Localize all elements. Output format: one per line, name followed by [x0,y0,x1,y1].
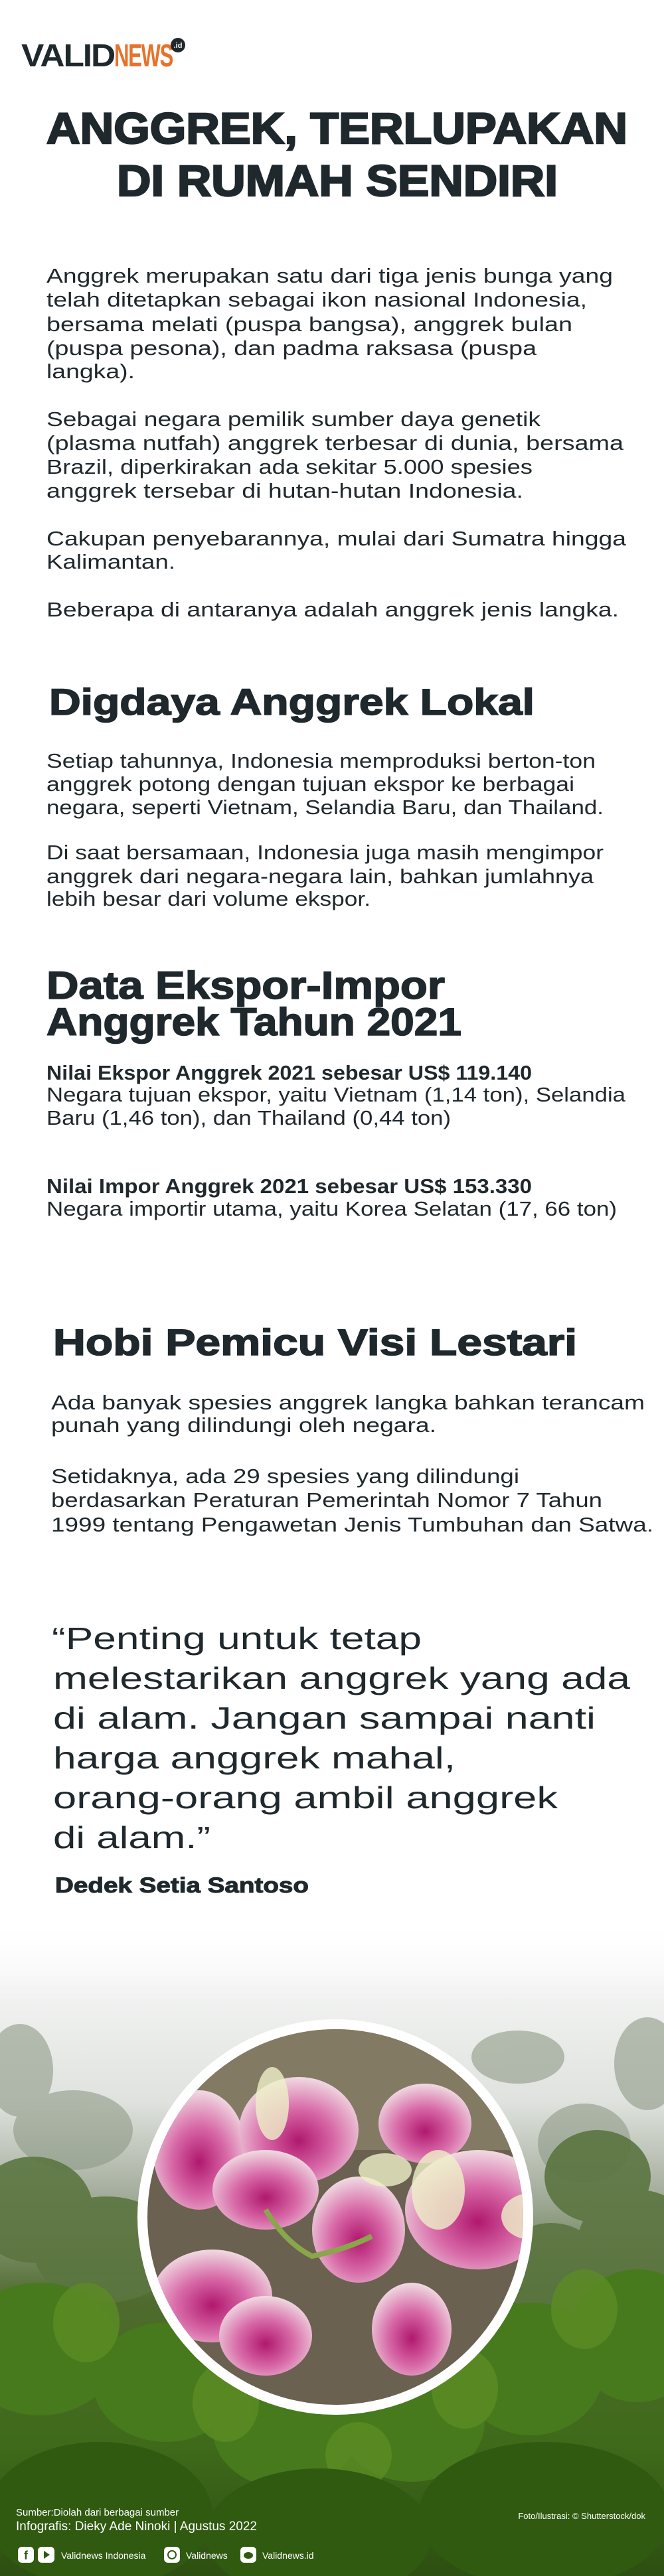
quote: di alam. Jangan sampai nanti [53,1701,596,1735]
text: local production: anggrek potong dengan tujuan ekspor ke berbagai [46,772,574,796]
intro text: Sebagai negara pemilik sumber daya genetik [46,407,541,431]
intro text: (plasma nutfah) anggrek terbesar di dunia, bersama [46,431,624,455]
quote: “Penting untuk tetap [52,1621,422,1656]
text: local production [46,749,604,910]
heading: Data Ekspor-Impor: Data Ekspor-Impor [46,964,445,1007]
text: local production: negara, seperti Vietnam, Selandia Baru, dan Thailand. [46,796,604,819]
logo [21,38,185,74]
export data: Nilai Ekspor Anggrek 2021 sebesar US$ 119.140 [46,1061,532,1084]
heading: Data Ekspor-Impor [46,964,461,1044]
import data: Negara importir utama, yaitu Korea Selatan (17, 66 ton) [46,1197,617,1220]
orchid circle photo [133,2017,561,2422]
heading: Digdaya Anggrek Lokal: Digdaya Anggrek Lokal [49,681,535,723]
text: protected species: berdasarkan Peraturan Pemerintah Nomor 7 Tahun [51,1488,602,1512]
import data: Nilai Impor Anggrek 2021 sebesar US$ 153.330 [46,1175,532,1198]
title [46,104,627,205]
intro text: (puspa pesona), dan padma raksasa (puspa [46,336,537,360]
quote: harga anggrek mahal, [53,1741,456,1775]
social media icons: Validnews [186,2550,228,2561]
quote: melestarikan anggrek yang ada [53,1661,631,1695]
text: protected species [51,1391,653,1536]
text: protected species: Setidaknya, ada 29 spesies yang dilindungi [51,1465,519,1488]
text: local production: Setiap tahunnya, Indonesia memproduksi berton-ton [46,749,596,772]
footer credits [16,2507,645,2534]
intro text: langka). [46,360,135,383]
social media icons: Validnews.id [262,2550,314,2561]
footer credits: Sumber:Diolah dari berbagai sumber [16,2507,179,2518]
import data [46,1175,617,1220]
export data: Baru (1,46 ton), dan Thailand (0,44 ton) [46,1106,451,1129]
intro text: bersama melati (puspa bangsa), anggrek bulan [46,313,572,336]
intro text: Brazil, diperkirakan ada sekitar 5.000 spesies [46,455,533,478]
heading: Data Ekspor-Impor: Anggrek Tahun 2021 [46,1001,461,1044]
export data [46,1061,626,1129]
quote: orang-orang ambil anggrek [53,1780,558,1815]
quote author: Dedek Setia Santoso [55,1873,309,1897]
heading: Hobi Pemicu Visi Lestari: Hobi Pemicu Visi Lestari [53,1321,577,1363]
text: local production: lebih besar dari volume ekspor. [46,887,371,910]
footer credits: Infografis: Dieky Ade Ninoki | Agustus 2022 [16,2520,257,2534]
social media icons [18,2547,314,2563]
intro text: Cakupan penyebarannya, mulai dari Sumatra hingga [46,527,627,550]
social media icons: f [24,2549,29,2562]
text: protected species: punah yang dilindungi oleh negara. [51,1413,436,1437]
logo: .id [174,42,182,50]
intro text: Beberapa di antaranya adalah anggrek jenis langka. [46,598,619,621]
intro text: Kalimantan. [46,550,175,573]
intro text [46,264,627,621]
intro text: telah ditetapkan sebagai ikon nasional Indonesia, [46,288,587,311]
intro text: Anggrek merupakan satu dari tiga jenis bunga yang [46,264,613,287]
logo: NEWS [114,38,173,74]
footer credits: Foto/Ilustrasi: © Shutterstock/dok [518,2511,645,2521]
export data: Negara tujuan ekspor, yaitu Vietnam (1,14 ton), Selandia [46,1083,626,1106]
text: local production: Di saat bersamaan, Indonesia juga masih mengimpor [46,841,604,864]
text: local production: anggrek dari negara-negara lain, bahkan jumlahnya [46,865,594,888]
text: protected species: Ada banyak spesies anggrek langka bahkan terancam [51,1391,645,1414]
social media icons: Validnews Indonesia [61,2550,146,2561]
forest background photo [0,1918,664,2576]
text: protected species: 1999 tentang Pengawetan Jenis Tumbuhan dan Satwa. [51,1513,653,1536]
intro text: anggrek tersebar di hutan-hutan Indonesia. [46,479,523,502]
logo: VALID [21,38,114,74]
title: DI RUMAH SENDIRI [117,156,558,205]
quote [52,1621,631,1855]
title: ANGGREK, TERLUPAKAN [46,104,627,153]
quote: di alam.” [53,1820,210,1855]
